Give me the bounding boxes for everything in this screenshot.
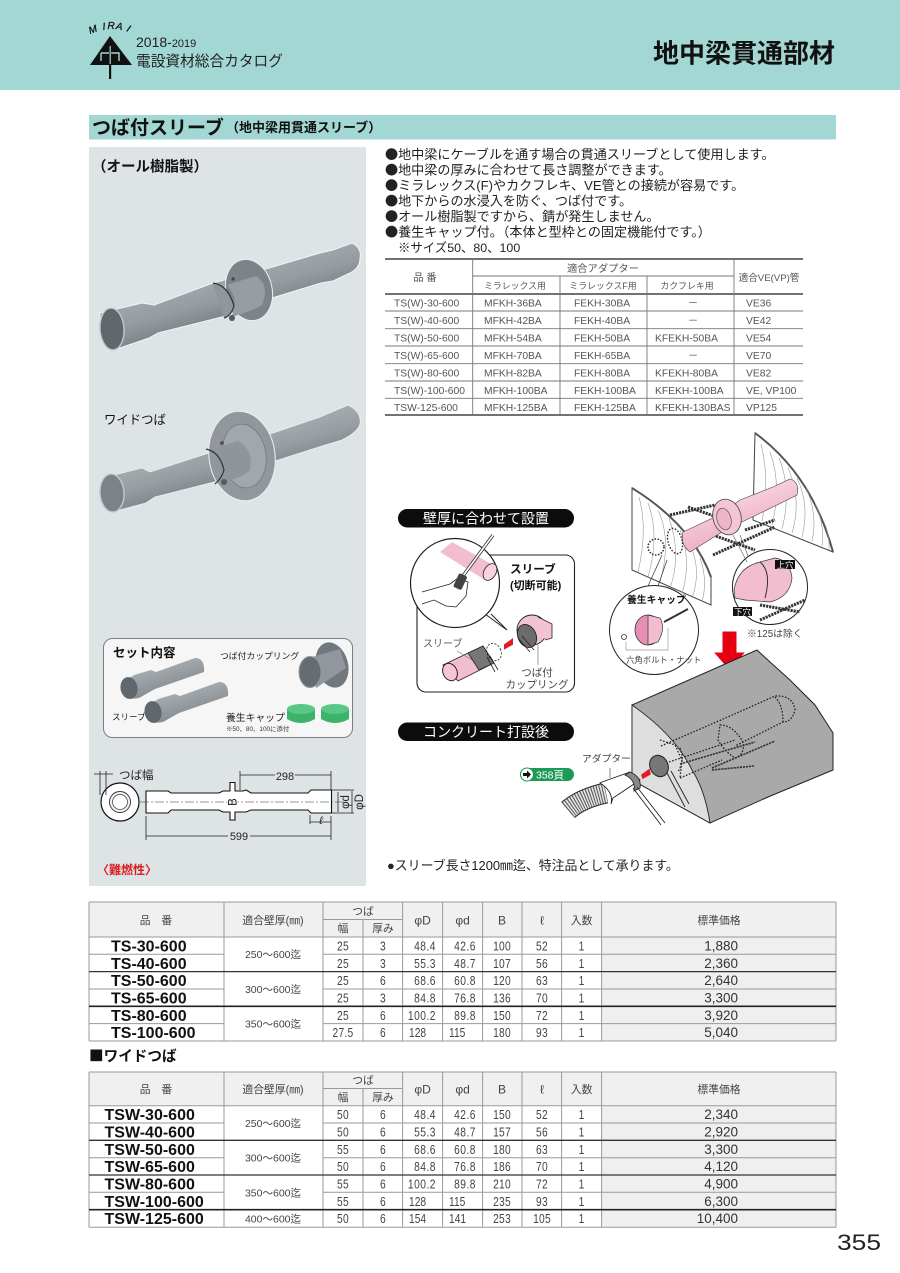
- table rows: VE42: [746, 316, 771, 327]
- table header: [413, 262, 800, 291]
- table rows: MFKH-82BA: [484, 368, 542, 380]
- product names: TSW-50-600: [104, 1142, 195, 1159]
- wall thickness ranges: [245, 1117, 302, 1226]
- dimension values: 55.3: [414, 958, 436, 971]
- prices: 3,300: [704, 1142, 738, 1157]
- dimension values: 50: [337, 1109, 349, 1122]
- subheading: wide flange: ■ワイドつば: [89, 1045, 177, 1066]
- prices: 3,300: [704, 990, 738, 1006]
- price table: standard flange: [89, 902, 836, 1042]
- upper hole tag: 上穴: [777, 560, 794, 570]
- table header: φD: [414, 914, 431, 928]
- feature bullets: ●オール樹脂製ですから、錆が発生しません。: [385, 206, 660, 225]
- dotted sleeve inside: [660, 696, 795, 778]
- red arrow: [505, 640, 512, 648]
- dimension values: 6: [380, 1144, 386, 1157]
- table rows: FEKH-30BA: [574, 298, 630, 310]
- table header: 厚み: [372, 922, 394, 935]
- wall thickness ranges: 300～600迄: [245, 983, 302, 996]
- illustration: forms and sleeve: [610, 433, 833, 674]
- prices: 3,920: [704, 1008, 738, 1023]
- table header: 入数: [571, 1083, 593, 1096]
- illustration: concrete block: [520, 650, 833, 825]
- dimension 298: 298: [276, 771, 294, 783]
- table header: ℓ: [540, 1082, 544, 1096]
- pill: install to wall thickness: 壁厚に合わせて設置: [423, 510, 549, 526]
- section heading bar: [89, 115, 836, 140]
- dimension values: 50: [337, 1213, 349, 1226]
- product names: [104, 1107, 204, 1228]
- prices: [697, 1107, 738, 1226]
- table rows: KFEKH-50BA: [655, 334, 718, 344]
- dimension values: [333, 941, 585, 1040]
- table header: 幅: [338, 1091, 349, 1104]
- pill: after concrete pour: コンクリート打設後: [423, 724, 549, 740]
- dimension values: 1: [579, 993, 585, 1006]
- catalog name: 電設資材総合カタログ: [136, 53, 283, 70]
- dimension values: 50: [337, 1127, 349, 1140]
- logo: MIRAI: MIRAI: [87, 21, 132, 37]
- dimension values: 42.6: [454, 1109, 476, 1122]
- table rows: VE70: [746, 351, 771, 362]
- dimension values: 1: [579, 1144, 585, 1157]
- table rows: TS(W)-50-600: [394, 334, 459, 344]
- dimension values: 6: [380, 1127, 386, 1140]
- dimension values: 100: [493, 941, 511, 954]
- note: except 125: ※125は除く: [747, 627, 803, 640]
- dimension values: 128: [409, 1196, 426, 1209]
- dimension values: 105: [533, 1213, 551, 1226]
- table rows: VE54: [746, 334, 771, 344]
- saw: [460, 535, 493, 580]
- label: sleeve small: スリーブ: [423, 637, 462, 650]
- dimension values: 150: [493, 1010, 511, 1023]
- product names: TSW-30-600: [104, 1107, 195, 1124]
- dimension values: 25: [337, 958, 349, 971]
- dimension values: 52: [536, 1109, 548, 1122]
- wall thickness ranges: 250～600迄: [245, 948, 302, 961]
- dimension values: 1: [579, 1027, 585, 1040]
- label: flanged coupling small: つば付: [521, 666, 553, 679]
- dimension values: 186: [493, 1161, 511, 1174]
- dimension values: 68.6: [414, 975, 436, 988]
- table rows: FEKH-80BA: [574, 368, 630, 380]
- table rows: FEKH-50BA: [574, 334, 630, 344]
- dimension values: 70: [536, 993, 548, 1006]
- dimension values: 235: [493, 1196, 511, 1209]
- table rows: KFEKH-80BA: [655, 368, 718, 380]
- coupling illustration: [514, 615, 552, 665]
- dimension values: 3: [380, 958, 386, 971]
- page number: 355: [837, 1230, 881, 1255]
- table header: 品 番: [140, 1083, 172, 1096]
- page title: 地中梁貫通部材: [653, 38, 835, 68]
- section heading bar: つば付スリーブ: [92, 116, 224, 139]
- dimension values: 55: [337, 1179, 349, 1192]
- dimension values: 72: [536, 1010, 548, 1023]
- table rows: [394, 298, 797, 414]
- tube 2: [143, 682, 228, 724]
- dimension values: 93: [536, 1196, 548, 1209]
- table rows: KFEKH-130BAS: [655, 403, 731, 414]
- dimension values: 48.4: [414, 1109, 436, 1122]
- table rows: FEKH-100BA: [574, 386, 636, 397]
- table header: B: [498, 1082, 506, 1096]
- arrow to hole: [642, 770, 650, 778]
- dimension values: 6: [380, 1213, 386, 1226]
- tube 1: [119, 658, 204, 700]
- dimension values: 56: [536, 1127, 548, 1140]
- lower hole tag: 下穴: [734, 607, 751, 617]
- table header: 厚み: [372, 1091, 394, 1104]
- table rows: －: [688, 298, 698, 310]
- table rows: －: [688, 351, 698, 362]
- dimension values: 1: [579, 1127, 585, 1140]
- table header: 入数: [571, 914, 593, 927]
- dimension values: 72: [536, 1179, 548, 1192]
- table rows: KFEKH-100BA: [655, 386, 724, 397]
- dimension values: 70: [536, 1161, 548, 1174]
- section heading bar: （地中梁用貫通スリーブ）: [226, 120, 381, 135]
- prices: 2,360: [704, 956, 738, 971]
- dimension values: 141: [449, 1213, 466, 1226]
- table header: 標準価格: [697, 1082, 741, 1096]
- photo: wide flange sleeve: [99, 405, 360, 513]
- table rows: VE, VP100: [746, 386, 797, 397]
- dimension values: 60.8: [454, 1144, 476, 1157]
- product names: TS-30-600: [111, 938, 187, 956]
- dimension values: 6: [380, 1161, 386, 1174]
- panel: set contents: [104, 638, 353, 738]
- table header: 品 番: [140, 914, 172, 927]
- dimension values: 55.3: [414, 1127, 436, 1140]
- table header: [140, 1074, 741, 1104]
- prices: 6,300: [704, 1194, 738, 1209]
- dimension values: 89.8: [454, 1010, 476, 1023]
- table header: カクフレキ用: [660, 281, 714, 291]
- dimension values: 63: [536, 1144, 548, 1157]
- dimension values: 89.8: [454, 1179, 476, 1192]
- product names: TSW-125-600: [104, 1211, 204, 1228]
- table rows: MFKH-100BA: [484, 386, 548, 397]
- prices: 1,880: [704, 938, 738, 954]
- left form board: [632, 488, 711, 605]
- dimension 599: 599: [230, 831, 248, 843]
- dimension values: 3: [380, 993, 386, 1006]
- dimension values: 115: [449, 1196, 465, 1209]
- table header: 品 番: [413, 272, 437, 284]
- dimension l: ℓ: [318, 815, 323, 827]
- dimension values: 93: [536, 1027, 548, 1040]
- table rows: VE36: [746, 298, 771, 310]
- dimension phi d: φd: [340, 795, 352, 809]
- material heading: （オール樹脂製）: [92, 158, 208, 176]
- dimension values: 120: [493, 975, 511, 988]
- wall thickness ranges: [245, 948, 302, 1030]
- green cap 1: [287, 704, 315, 723]
- product names: TSW-80-600: [104, 1176, 195, 1194]
- wall thickness ranges: 400～600迄: [245, 1212, 302, 1226]
- table rows: TS(W)-100-600: [394, 386, 465, 397]
- table rows: FEKH-65BA: [574, 351, 630, 362]
- cuttable label: (切断可能): [510, 578, 562, 592]
- table header: φd: [455, 914, 470, 928]
- dimension values: [337, 1109, 585, 1226]
- dimension values: 1: [579, 975, 585, 988]
- prices: 4,900: [704, 1176, 738, 1192]
- dimension values: 42.6: [454, 941, 476, 954]
- dimension values: 100.2: [408, 1179, 436, 1192]
- wall thickness ranges: 350～600迄: [245, 1186, 302, 1199]
- dimension values: 25: [337, 941, 349, 954]
- dimension values: 180: [493, 1027, 511, 1040]
- prices: 2,640: [704, 973, 738, 988]
- dimension values: 1: [579, 941, 585, 954]
- dimension values: 150: [493, 1109, 511, 1122]
- dimension values: 55: [337, 1144, 349, 1157]
- hole opening: [646, 752, 672, 780]
- product names: TS-80-600: [111, 1008, 187, 1025]
- table rows: VP125: [746, 403, 777, 414]
- header band: [0, 0, 900, 90]
- table header: ℓ: [540, 914, 544, 928]
- pink sleeve: [648, 479, 798, 555]
- table header: 幅: [338, 922, 349, 935]
- photo: standard sleeve: [99, 243, 360, 351]
- dimension phi D: φD: [354, 794, 366, 810]
- dimension values: 136: [493, 993, 511, 1006]
- right form board: [753, 433, 833, 552]
- table rows: MFKH-125BA: [484, 403, 548, 414]
- link: page 358: 358頁: [536, 770, 564, 782]
- prices: 4,120: [704, 1159, 738, 1174]
- dimension values: 6: [380, 1010, 386, 1023]
- label: bolt and nut: 六角ボルト・ナット: [626, 655, 701, 665]
- hand: [422, 578, 468, 607]
- product names: TSW-100-600: [104, 1194, 204, 1211]
- dimension values: 52: [536, 941, 548, 954]
- green cap 2: [321, 704, 349, 723]
- dimension values: 210: [493, 1179, 511, 1192]
- dimension values: 115: [449, 1027, 465, 1040]
- table rows: TS(W)-40-600: [394, 316, 459, 327]
- feature bullets: ●地中梁にケーブルを通す場合の貫通スリーブとして使用します。: [385, 144, 775, 163]
- dimension values: 84.8: [414, 1161, 436, 1174]
- dimension values: 100.2: [408, 1010, 436, 1023]
- dimension values: 48.7: [454, 1127, 476, 1140]
- price table: wide flange: [89, 1072, 836, 1228]
- dimension values: 25: [337, 1010, 349, 1023]
- product names: TS-100-600: [111, 1025, 196, 1042]
- adapter with conduit: [568, 768, 665, 825]
- dimension values: 6: [380, 1179, 386, 1192]
- detail circle: protective cap: [610, 555, 698, 674]
- dimension values: 25: [337, 975, 349, 988]
- dimension values: 157: [493, 1127, 511, 1140]
- wall thickness ranges: 350～600迄: [245, 1018, 302, 1030]
- dimension values: 154: [409, 1213, 427, 1226]
- sleeve label: スリーブ: [510, 562, 556, 576]
- prices: 5,040: [704, 1025, 738, 1040]
- dimension values: 1: [579, 1179, 585, 1192]
- dimension values: 6: [380, 1109, 386, 1122]
- product names: TSW-40-600: [104, 1124, 195, 1142]
- label: protective cap: 養生キャップ: [226, 711, 285, 724]
- panel: product photos: [89, 147, 366, 886]
- feature bullets: ●養生キャップ付。（本体と型枠との固定機能付です。）: [385, 222, 711, 240]
- dimension values: 1: [579, 1161, 585, 1174]
- dimension values: 84.8: [414, 993, 436, 1006]
- feature bullets: ●地中梁の厚みに合わせて長さ調整ができます。: [385, 160, 672, 178]
- table rows: TS(W)-30-600: [394, 298, 459, 310]
- dimension values: 48.4: [414, 941, 436, 954]
- dimension values: 6: [380, 1196, 386, 1209]
- dimension values: 128: [409, 1027, 426, 1040]
- dimension values: 50: [337, 1161, 349, 1174]
- dimension values: 76.8: [454, 1161, 476, 1174]
- dimension values: 107: [493, 958, 511, 971]
- dimension values: 6: [380, 975, 386, 988]
- set heading: セット内容: [113, 645, 176, 660]
- dimension values: 3: [380, 941, 386, 954]
- dimension values: 1: [579, 1109, 585, 1122]
- prices: [704, 938, 738, 1040]
- dimension values: 27.5: [333, 1027, 353, 1040]
- catalog year: 2018-2019: [136, 34, 196, 50]
- logo: MIRAI: [87, 21, 132, 79]
- table header: φD: [414, 1082, 431, 1096]
- table header: つば: [352, 905, 374, 918]
- dimension values: 55: [337, 1196, 349, 1209]
- note: cap sizes: ※50、80、100に添付: [226, 724, 290, 733]
- table rows: TS(W)-80-600: [394, 368, 459, 380]
- red down arrow: [713, 631, 746, 671]
- table header: [140, 905, 741, 935]
- table header: つば: [352, 1074, 374, 1087]
- dimension values: 1: [579, 1010, 585, 1023]
- table rows: MFKH-70BA: [484, 351, 542, 362]
- label: wide flange: ワイドつば: [104, 413, 167, 427]
- table header: 適合VE(VP)管: [739, 272, 800, 284]
- product names: TSW-65-600: [104, 1159, 195, 1176]
- illustration: cutting the sleeve: [410, 535, 574, 692]
- dimension values: 56: [536, 958, 548, 971]
- dimension values: 253: [493, 1213, 511, 1226]
- product names: TS-40-600: [111, 956, 187, 973]
- dimension values: 1: [579, 1213, 585, 1226]
- label: sleeve: スリーブ: [112, 712, 146, 722]
- wall thickness ranges: 300～600迄: [245, 1152, 302, 1165]
- dimension values: 1: [579, 1196, 585, 1209]
- product names: [111, 938, 196, 1042]
- label: adapter: アダプター: [582, 752, 631, 765]
- feature bullets: ※サイズ50、80、100: [398, 240, 520, 255]
- dimension B: B: [228, 798, 240, 806]
- dimension values: 48.7: [454, 958, 476, 971]
- table header: 標準価格: [697, 913, 741, 927]
- sleeve end: [440, 641, 504, 683]
- table rows: MFKH-36BA: [484, 298, 542, 310]
- table header: 適合壁厚(㎜): [242, 913, 304, 927]
- pill: after concrete pour: [398, 722, 574, 741]
- table rows: TSW-125-600: [394, 403, 458, 414]
- prices: 2,340: [704, 1107, 738, 1122]
- label: flanged coupling: つば付カップリング: [220, 650, 299, 661]
- table rows: －: [688, 316, 698, 327]
- dimension values: 76.8: [454, 993, 476, 1006]
- product names: TS-65-600: [111, 990, 187, 1008]
- coupling photo: [299, 639, 353, 691]
- feature bullets: [385, 144, 775, 255]
- table rows: TS(W)-65-600: [394, 351, 459, 362]
- dimension drawing: [94, 769, 366, 843]
- note: long sleeve: ●スリーブ長さ1200㎜迄、特注品として承ります。: [387, 858, 679, 873]
- table header: φd: [455, 1082, 470, 1096]
- dimension values: 1: [579, 958, 585, 971]
- product names: TS-50-600: [111, 973, 187, 990]
- feature bullets: ●地下からの水浸入を防ぐ、つば付です。: [385, 190, 632, 210]
- flame retardant label: 〈難燃性〉: [97, 862, 157, 877]
- link: page 358: [520, 768, 574, 782]
- illustration: cutting the sleeve: カップリング: [506, 678, 569, 691]
- feature bullets: ●ミラレックス(F)やカクフレキ、VE管との接続が容易です。: [385, 175, 744, 194]
- dimension values: 6: [380, 1027, 386, 1040]
- detail circle: upper and lower holes: [732, 535, 808, 624]
- table rows: MFKH-54BA: [484, 334, 542, 344]
- pill: install to wall thickness: [398, 509, 574, 528]
- table header: ミラレックス用: [484, 281, 546, 291]
- dimension values: 180: [493, 1144, 511, 1157]
- prices: 2,920: [704, 1124, 738, 1140]
- dimension values: 68.6: [414, 1144, 436, 1157]
- table header: 適合壁厚(㎜): [242, 1082, 304, 1096]
- dimension values: 25: [337, 993, 349, 1006]
- table header: 適合アダプター: [567, 262, 639, 275]
- table rows: VE82: [746, 368, 771, 380]
- dimension values: 60.8: [454, 975, 476, 988]
- pink sleeve being cut: [440, 542, 495, 580]
- prices: 10,400: [697, 1211, 738, 1226]
- label: flange width: つば幅: [119, 769, 154, 782]
- table rows: MFKH-42BA: [484, 316, 542, 327]
- adapter table: [385, 259, 803, 415]
- wall thickness ranges: 250～600迄: [245, 1117, 302, 1130]
- rebar: [670, 505, 775, 555]
- table header: ミラレックスF用: [569, 281, 637, 291]
- dimension values: 63: [536, 975, 548, 988]
- table rows: FEKH-125BA: [574, 403, 636, 414]
- table header: B: [498, 914, 506, 928]
- label: protective cap: 養生キャップ: [627, 593, 686, 606]
- table rows: FEKH-40BA: [574, 316, 630, 327]
